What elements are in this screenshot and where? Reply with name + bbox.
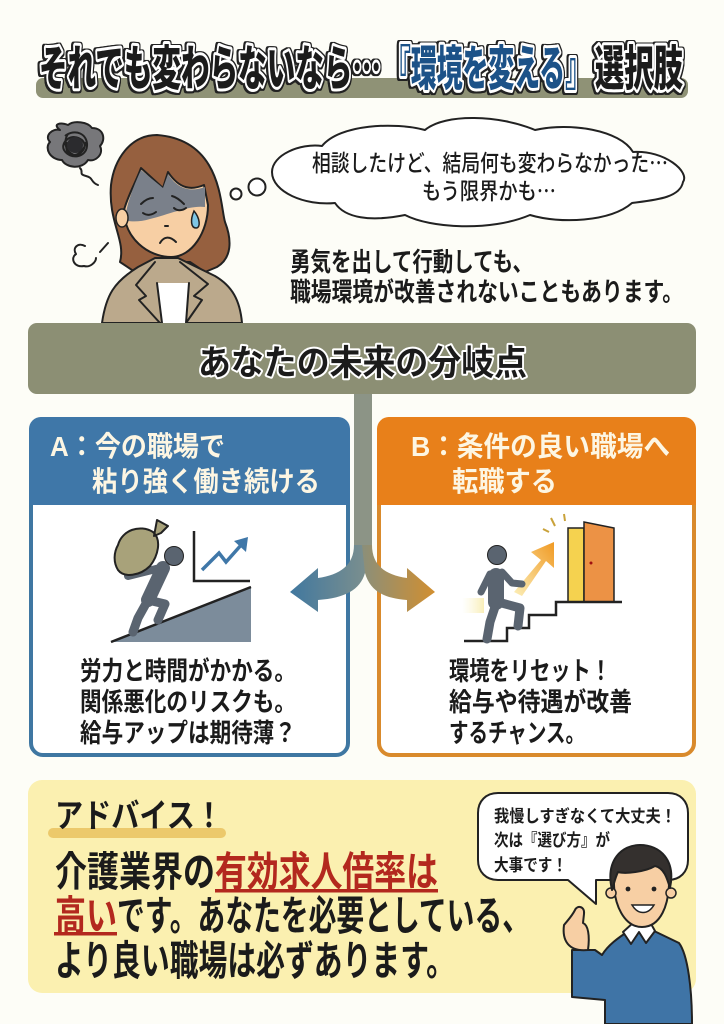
panel A heading: A：今の職場で	[50, 431, 225, 462]
panel B text: 環境をリセット！	[449, 656, 611, 686]
panel A text: 給与アップは期待薄？	[80, 718, 296, 748]
banner: branch point	[28, 323, 696, 394]
panel A heading: 粘り強く働き続ける	[92, 466, 320, 497]
arrows: branching paths	[290, 394, 435, 612]
illustration: man giving thumbs up	[564, 845, 692, 1024]
panel B text: 給与や待遇が改善	[449, 687, 632, 717]
advice message: 有効求人倍率は	[215, 849, 438, 895]
advice message: より良い職場は必ずあります。	[55, 938, 455, 984]
advice heading: アドバイス！	[55, 797, 223, 834]
intro text	[290, 247, 683, 307]
panel A	[29, 417, 350, 755]
panel A heading	[50, 431, 320, 497]
title band	[36, 78, 688, 98]
icon: person climbing stairs to open door	[462, 514, 622, 641]
panel B text: するチャンス。	[449, 718, 585, 748]
speech bubble: 次は『選び方』が	[494, 830, 610, 850]
advice message	[54, 849, 530, 984]
thought bubble: もう限界かも…	[422, 172, 556, 206]
intro text: 勇気を出して行動しても、	[290, 247, 533, 277]
thought bubble	[230, 118, 684, 226]
icon: person carrying sack uphill with rising chart	[111, 520, 251, 642]
advice message: です。あなたを必要としている、	[117, 893, 530, 939]
panel B text	[449, 656, 632, 748]
speech bubble	[478, 793, 688, 904]
speech bubble: 我慢しすぎなくて大丈夫！	[494, 806, 676, 826]
panel B	[377, 417, 696, 755]
panel A text: 労力と時間がかかる。	[80, 656, 296, 686]
illustration: worried woman	[73, 135, 242, 323]
thought bubble: 相談したけど、結局何も変わらなかった…	[312, 144, 668, 178]
panel B heading: B：条件の良い職場へ	[411, 431, 670, 462]
banner: branch point: あなたの未来の分岐点	[198, 344, 527, 383]
icon: dark stress cloud	[48, 122, 103, 185]
advice message: 介護業界の	[55, 849, 215, 895]
title: それでも変わらないなら…	[39, 29, 381, 99]
speech bubble: 大事です！	[494, 856, 567, 875]
advice message: 高い	[55, 893, 117, 939]
panel A text	[80, 656, 296, 748]
advice panel	[28, 780, 696, 993]
panel A text: 関係悪化のリスクも。	[80, 687, 296, 717]
panel B heading	[411, 431, 670, 497]
panel B heading: 転職する	[452, 466, 557, 497]
